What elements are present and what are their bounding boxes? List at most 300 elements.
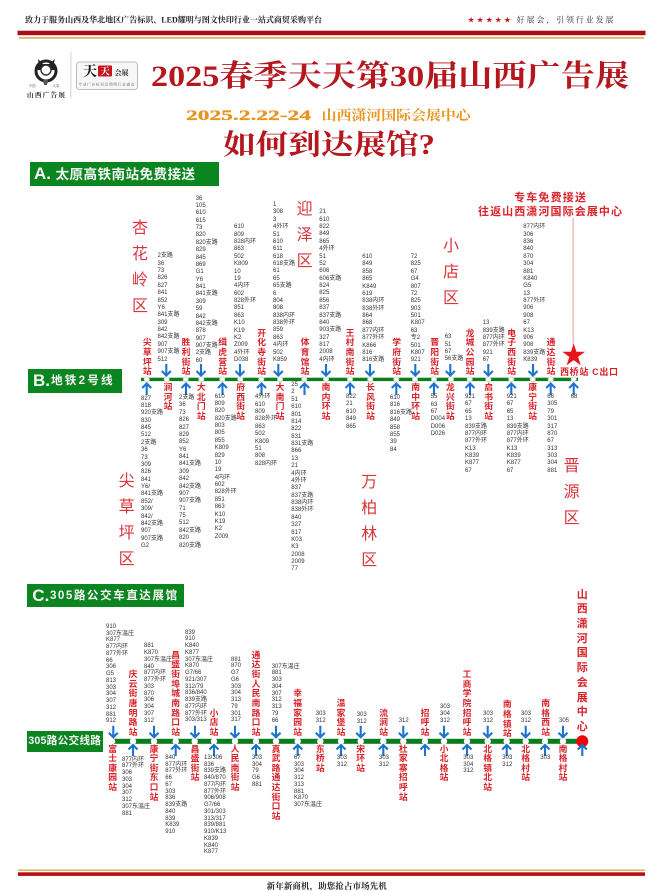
bus list: 大南门站: 6: [273, 290, 276, 296]
bus list: 长风街站: 877内环: [362, 328, 384, 334]
bus list: 大南门站: 863: [273, 335, 283, 341]
district: 迎泽区: 迎泽区: [297, 201, 313, 270]
bus list: 富士康园站: 303: [106, 685, 116, 691]
bus list: 缉虎营站: 828外环: [215, 489, 237, 495]
bus list: 康宁街站: 304: [523, 261, 533, 267]
bus list: 庆云街唐明路站: 306: [122, 770, 132, 776]
stop: 小店站: 小店站: [210, 708, 218, 737]
bus list: 学府街站: 84: [390, 447, 397, 453]
bus list: 大南门站: 859: [273, 327, 283, 333]
bus list: 康宁街站: K840: [523, 276, 537, 282]
bus list: 龙城公园站: 13: [465, 416, 472, 422]
bus list: 缉虎营站: 820: [215, 408, 225, 414]
bus list: 学府街站: 849: [390, 417, 400, 423]
bus list: 南内环站: 824: [319, 283, 329, 289]
bus list: 涧河站: 36: [158, 261, 164, 267]
bus list: 龙城公园站: K839: [465, 453, 479, 459]
stop: 通达街人民南路口站: 通达街人民南路口站: [252, 650, 260, 737]
bus list: 缉虎营站: 855: [215, 438, 225, 444]
bus list: 昌盛街埠城南路口站: 877外环: [165, 768, 187, 774]
bus list: 人民南街站: 303: [231, 684, 241, 690]
bus list: 府西街站: K19: [234, 328, 245, 334]
bus list: 开化寺街站: 809: [255, 409, 265, 415]
logo: emblem: 中国: [28, 83, 36, 88]
station: 开化寺街站: 开化寺街站: [257, 328, 266, 376]
bus list: 长风街站: 619: [362, 291, 372, 297]
bus list: 南中环站: [411, 254, 425, 363]
station: 王村南街站: 王村南街站: [346, 328, 354, 376]
bus list: 电子西街站: 67: [507, 401, 513, 407]
bus list: 北格镇北站: 312: [483, 718, 493, 724]
bus list: 小北格站: [440, 704, 450, 724]
bus list: 大南门站: 4外环: [273, 224, 288, 230]
bus list: 王村南街站: 865: [346, 424, 356, 430]
bus list: 昌盛街站: K877: [185, 650, 199, 656]
bus list: 昌盛街埠城南路口站: 303: [165, 789, 175, 795]
bus list: 小北格站: 312: [440, 718, 450, 724]
bus list: 幸福家园站: 303: [294, 762, 304, 768]
bus list: 府西街站: 610: [234, 224, 244, 230]
bus list: 缉虎营站: 851: [215, 497, 225, 503]
bus list: 电子西街站: 877外环: [507, 438, 529, 444]
metro line: [141, 378, 578, 381]
bus list: 大北门站: Y6: [196, 277, 203, 283]
bus list: 府西街站: 502: [234, 254, 244, 260]
bus list: 东桥站: 312: [316, 718, 326, 724]
bus list: 通达街站: [547, 394, 558, 474]
bus list: 长风街站: 838内环: [362, 298, 384, 304]
bus list: 大北门站: 2支路: [196, 350, 211, 356]
bus list: 真武路通达街口站: 881: [272, 670, 282, 676]
bus list: 涧河站: 842: [158, 327, 168, 333]
bus list: 庆云街唐明路站: 877外环: [122, 763, 144, 769]
bus list: 胜利街站: 820: [179, 535, 189, 541]
bus list: 尖草坪站: Y6/: [141, 484, 150, 490]
bus list: 开化寺街站: 808: [255, 453, 265, 459]
bus list: 小店站: 301/303: [204, 809, 226, 815]
bus list: 小店站: 313/317: [204, 816, 226, 822]
bus list: 缉虎营站: K2: [215, 526, 222, 532]
bus list: 南中环站: 903: [411, 306, 421, 312]
stop: 人民南街站: 人民南街站: [231, 744, 239, 792]
stop: 温家堡站: 温家堡站: [337, 698, 345, 737]
bus list: 温家堡站: 312: [337, 762, 347, 768]
bus list: 昌盛街埠城南路口站: 910: [165, 829, 175, 835]
top right slogan: ★★★★★ 好展会，引领行业发展: [468, 14, 614, 26]
bus list: 昌盛街埠城南路口站: 836: [165, 795, 175, 801]
bus list: 尖草坪站: 73: [141, 455, 148, 461]
red header bar: [18, 31, 646, 35]
footer gold bar: [18, 869, 645, 871]
bus list: 胜利街站: 309: [179, 469, 189, 475]
footer red bar: [18, 872, 645, 876]
bus list: 缉虎营站: K19: [215, 519, 225, 525]
bus list: 工商学院招呼站: 304: [463, 762, 473, 768]
bus list: 电子西街站: K13: [507, 446, 517, 452]
bus list: 工商学院招呼站: 312: [463, 768, 473, 774]
bus list: 长风街站: 816支路: [362, 357, 384, 363]
bus list: 康宁街东口站: 877外环: [144, 677, 166, 683]
bus list: 龙城公园站: [465, 394, 487, 474]
bus list: 昌盛街站: 910: [185, 636, 195, 642]
bus list: 涧河站: [158, 252, 180, 363]
footer slogan: 新年新商机，助您抢占市场先机: [267, 881, 387, 891]
bus list: 府西街站: K10: [234, 320, 245, 326]
bus list: 真武路通达街口站: 313: [272, 704, 282, 710]
bus list: 胜利街站: 73: [179, 410, 186, 416]
bus list: 南中环站: G4: [411, 276, 419, 282]
bus list: 康宁街站: 881: [523, 269, 533, 275]
bus list: 南中环站: 67: [411, 269, 417, 275]
bus list: 康宁街东口站: 307东温庄: [144, 657, 172, 663]
bus list: 龙城公园站: K13: [465, 446, 476, 452]
station: 府西街站: 府西街站: [236, 382, 245, 421]
bus list: 龙城公园站: 67: [465, 401, 472, 407]
stop: 昌盛街埠城南路口站: 昌盛街埠城南路口站: [171, 650, 180, 737]
bus list: 人民南街站: 304: [231, 690, 241, 696]
arrows pointing down to bus line: [109, 726, 568, 737]
bus list: 流涧站: 312: [379, 762, 389, 768]
section A heading: A.: [34, 164, 51, 183]
bus list: 富士康园站: 877外环: [106, 651, 128, 657]
terminal: 山西潇河国际会展中心: 山西潇河国际会展中心: [577, 589, 588, 733]
bus list: 尖草坪站: 826: [141, 469, 151, 475]
bus list: 体育馆站: 837: [291, 485, 301, 491]
bus list: 昌盛街站: K870: [185, 663, 199, 669]
section C heading: C.: [32, 586, 49, 605]
bus list: 开化寺街站: K809: [255, 439, 269, 445]
bus list: 南内环站: 21: [319, 209, 326, 215]
bus list: 通达街人民南路口站: 303: [252, 755, 262, 761]
subtitle question: 如何到达展馆?: [223, 129, 435, 161]
bus list: 尖草坪站: 36: [141, 447, 148, 453]
bus list: 流涧站: 303: [379, 755, 389, 761]
bus list: 大北门站: 820: [196, 232, 206, 238]
stop: 康宁街东口站: 康宁街东口站: [150, 744, 158, 802]
bus list: 胜利街站: 71: [179, 506, 186, 512]
bus list: 昌盛街埠城南路口站: 840: [165, 809, 175, 815]
bus list: 通达街站: 870: [547, 431, 557, 437]
bus list: 康宁街站: 306: [523, 232, 533, 238]
bus list: 南内环站: 865: [319, 239, 329, 245]
bus list: 通达街站: 301: [547, 416, 557, 422]
bus list: 电子西街站: [507, 394, 529, 474]
bus list: 启书街站: 877内环: [483, 335, 505, 341]
bus list: 大南门站: 618: [273, 254, 283, 260]
bus list: 通达街站: 304: [547, 460, 557, 466]
bus list: 体育馆站: 838内环: [291, 500, 313, 506]
bus list: 尖草坪站: 841支路: [141, 491, 163, 497]
bus list: 南内环站: 4内环: [319, 357, 335, 363]
bus list: 胜利街站: 2支路: [179, 395, 194, 401]
bus list: 晋阳街站: 55: [431, 394, 437, 400]
bus list: 昌盛街埠城南路口站: 840: [165, 755, 175, 761]
section C heading: [27, 584, 184, 607]
bus list: 长风街站: [362, 254, 384, 363]
bus list: 真武路通达街口站: 303: [272, 677, 282, 683]
bus list: 通达街站: 313: [547, 446, 557, 452]
bus list: 通达街站: 881: [547, 468, 557, 474]
bus list: 龙城公园站: 839支路: [465, 424, 487, 430]
bus list: 大北门站: 820支路: [196, 240, 218, 246]
bus list: 大北门站: 36: [196, 196, 202, 202]
bus list: 胜利街站: 36: [179, 402, 186, 408]
bus list: 康宁街站: 13: [523, 291, 530, 297]
bus list: 西桥站: 68: [571, 394, 577, 400]
bus list: 龙城公园站: 65: [465, 409, 472, 415]
bus list: 开化寺街站: [255, 392, 277, 467]
bus list: 体育馆站: 814: [291, 419, 301, 425]
bus list: 南内环站: 51: [319, 254, 326, 260]
bus list: 尖草坪站: 845: [141, 425, 151, 431]
bus list: 尖草坪站: 309: [141, 462, 151, 468]
logo: tiantian exhibition badge: 天: [100, 66, 110, 78]
bus list: 大南门站: 838内环: [273, 313, 295, 319]
bus list: 南格镇站: 303: [502, 755, 512, 761]
bus list: 开化寺街站: 863: [255, 424, 265, 430]
bus list: 启书街站: [483, 320, 505, 363]
bus list: 大北门站: 309: [196, 299, 206, 305]
bus list: 缉虎营站: 602: [215, 482, 225, 488]
district: 万柏林区: 万柏林区: [361, 474, 377, 569]
bus list: 龙兴街站: 63: [445, 334, 451, 340]
bus list: 幸福家园站: K870: [294, 795, 308, 801]
bus list: 富士康园站: K877: [106, 637, 120, 643]
bus list: 通达街站: 317: [547, 424, 557, 430]
bus list: 体育馆站: 51: [291, 397, 298, 403]
bus list: 南格西站: 303: [540, 755, 550, 761]
bus list: 真武路通达街口站: 79: [272, 711, 278, 717]
bus list: 晋阳街站: 67: [431, 409, 437, 415]
bus list: 东桥站: [316, 710, 326, 724]
bus list: 学府街站: 816支路: [390, 410, 412, 416]
bus list: 涧河站: 842支路: [158, 334, 180, 340]
bus list: 昌盛街站: 836/840: [185, 690, 207, 696]
station: 长风街站: 长风街站: [366, 382, 375, 421]
bus list: 胜利街站: 827: [179, 424, 189, 430]
stop: 南格镇站: 南格镇站: [503, 699, 512, 738]
logo: emblem: 太原: [52, 83, 60, 88]
bus list: 学府街站: 610: [390, 395, 400, 401]
bus list: 长风街站: 877外环: [362, 335, 384, 341]
bus list: 小店站: 839支路: [204, 768, 226, 774]
bus list: 体育馆站: 4内环: [291, 470, 307, 476]
bus list: 尖草坪站: 309/: [141, 506, 153, 512]
bus list: 昌盛街站: 839支路: [185, 697, 207, 703]
bus list: 富士康园站: 912: [106, 718, 116, 724]
bus list: 大南门站: [273, 202, 295, 363]
bus list: 流涧站: [379, 755, 389, 768]
bus list: 启书街站: 67: [483, 357, 489, 363]
bus list: 温家堡站: 303: [337, 755, 347, 761]
bus list: 胜利街站: 75: [179, 513, 186, 519]
route label: 305路公交线路: [28, 735, 101, 747]
bus list: 尖草坪站: 907支路: [141, 536, 163, 542]
section B heading: B.: [33, 371, 50, 390]
bus list: 康宁街站: G5: [523, 283, 531, 289]
bus list: 南中环站: 501: [411, 313, 421, 319]
section B heading: 地铁2号线: [51, 374, 115, 387]
bus list: 北格镇北站: 303: [483, 711, 493, 717]
bus list: 南中环站: 501: [411, 342, 421, 348]
bus list: 涧河站: 826: [158, 275, 168, 281]
stop: 北格镇北站: 北格镇北站: [483, 744, 492, 792]
bus list: 小店站: 839/881: [204, 822, 226, 828]
bus list: 尖草坪站: [141, 396, 163, 549]
bus list: 通达街人民南路口站: 79: [252, 768, 259, 774]
bus list: 王村南街站: 822: [346, 394, 356, 400]
bus list: 府西街站: 19: [234, 276, 241, 282]
bus list: 缉虎营站: 610: [215, 394, 225, 400]
bus list: 尖草坪站: 907: [141, 528, 151, 534]
bus list: 南中环站: 825: [411, 261, 421, 267]
bus list: 缉虎营站: 805: [215, 430, 225, 436]
bus list: 府西街站: 10: [234, 269, 241, 275]
bus list: 长风街站: 858: [362, 269, 372, 275]
bus list: 通达街站: 79: [547, 409, 554, 415]
bus list: 小店站: 840/870: [204, 775, 226, 781]
bus list: 开化寺街站: 502: [255, 431, 265, 437]
bus list: 学府街站: 858: [390, 424, 400, 430]
bus list: 大南门站: 838外环: [273, 320, 295, 326]
callout: free shuttle: 专车免费接送: [514, 190, 586, 204]
bus list: 开化寺街站: 51: [255, 446, 262, 452]
stop: 北格村站: 北格村站: [521, 744, 530, 782]
bus list: 尖草坪站: 512: [141, 432, 151, 438]
bus list: 大南门站: 61: [273, 268, 280, 274]
bus list: 体育馆站: 21: [291, 463, 298, 469]
bus list: 康宁街东口站: 877内环: [144, 670, 166, 676]
bus list: 体育馆站: 2009: [291, 559, 305, 565]
bus list: 真武路通达街口站: 307东温庄: [272, 664, 300, 670]
logo: tiantian exhibition badge: 专业广告标识及照明行业盛会: [78, 82, 135, 86]
bus list: 昌盛街埠城南路口站: 839支路: [165, 802, 187, 808]
bus list: 学府街站: 855: [390, 432, 400, 438]
bus list: 开化寺街站: 828外环: [255, 416, 277, 422]
bus list: 小店站: K877: [204, 849, 218, 855]
bus list: 庆云街唐明路站: 312: [122, 797, 132, 803]
bus list: 启书街站: 877外环: [483, 342, 505, 348]
bus list: 富士康园站: 304: [106, 691, 116, 697]
stop: 流涧站: 流涧站: [379, 708, 388, 737]
station: 学府街站: 学府街站: [392, 337, 401, 376]
bus list: 人民南街站: 79: [231, 704, 238, 710]
bus list: 大北门站: 842支路: [196, 321, 218, 327]
bus list: 大南门站: 308: [273, 209, 283, 215]
station: 大南门站: 大南门站: [276, 382, 284, 421]
bus list: 富士康园站: [106, 624, 134, 724]
bus list: 庆云街唐明路站: 304: [122, 784, 132, 790]
bus list: 涧河站: 512: [158, 357, 168, 363]
bus list: 涧河站: 852: [158, 298, 168, 304]
bus list: 胜利街站: 820支路: [179, 542, 201, 548]
bus list: 体育馆站: 25: [291, 382, 298, 388]
station: 通达街站: 通达街站: [547, 337, 555, 376]
bus list: 康宁街东口站: 840: [144, 664, 154, 670]
bus list: 府西街站: 863: [234, 246, 244, 252]
bus list: 长风街站: K849: [362, 284, 376, 290]
bus list: 晋阳街站: D026: [431, 431, 445, 437]
bus list: 人民南街站: G7: [231, 670, 239, 676]
bus list: 杜家寨招呼站: 312: [399, 718, 409, 724]
bus list: 庆云街唐明路站: 881: [122, 811, 132, 817]
stop: 工商学院招呼站: 工商学院招呼站: [463, 669, 471, 737]
logo: emblem: 山西广告展: [27, 90, 66, 99]
bus list: 长风街站: 838外环: [362, 306, 384, 312]
bus list: 大南门站: 611: [273, 246, 283, 252]
bus list: 胜利街站: [179, 394, 201, 548]
stop: 南格西站: 南格西站: [541, 698, 550, 737]
bus list: 大北门站: 73: [196, 225, 202, 231]
header: tagline bars, logos, titles: [18, 14, 646, 161]
bus list: 大南门站: 610: [273, 239, 283, 245]
bus list: 电子西街站: 921: [507, 394, 517, 400]
bus list: 南内环站: 606: [319, 268, 329, 274]
bus list: 富士康园站: 306: [106, 664, 116, 670]
bus list: 昌盛街埠城南路口站: 67: [165, 782, 172, 788]
bus list: 涧河站: 309: [158, 320, 168, 326]
bus list: 南中环站: 72: [411, 291, 417, 297]
bus list: 昌盛街埠城南路口站: 877内环: [165, 762, 187, 768]
bus list: 大南门站: 804: [273, 298, 283, 304]
bus list: 北格村站: 312: [521, 718, 531, 724]
bus list: 康宁街东口站: 306: [144, 697, 154, 703]
bus list: 康宁街站: 840: [523, 246, 533, 252]
bus list: 通达街人民南路口站: 304: [252, 762, 262, 768]
bus list: 涧河站: 2支路: [158, 253, 173, 259]
bus list: 南内环站: 327: [319, 335, 329, 341]
bus list: 涧河站: Y6: [158, 305, 165, 311]
bus list: 启书街站: 13: [483, 320, 489, 326]
bus list: 人民南街站: 313: [231, 697, 241, 703]
bus list: 康宁街东口站: [144, 642, 172, 724]
bus list: 宋环站: [357, 712, 367, 725]
bus list: 体育馆站: 327: [291, 522, 301, 528]
bus list: 南内环站: 610: [319, 217, 329, 223]
district: 杏花岭区: 杏花岭区: [132, 220, 148, 315]
station: 南中环站: 南中环站: [411, 382, 420, 421]
bus list: 康宁街站: K13: [523, 328, 534, 334]
bus list: 康宁街站: 836: [523, 239, 533, 245]
callout: free shuttle: 往返山西潇河国际会展中心: [478, 204, 622, 218]
bus list: 庆云街唐明路站: 303: [122, 777, 132, 783]
station: 大北门站: 大北门站: [197, 382, 206, 421]
bus list: 康宁街站: [523, 222, 545, 363]
date and venue: [186, 107, 473, 124]
bus list: 胜利街站: 512: [179, 520, 189, 526]
bus list: 涧河站: 907: [158, 342, 168, 348]
bus list: 大北门站: 842: [196, 314, 206, 320]
stop: 招呼站: 招呼站: [421, 708, 429, 737]
bus list: 小店站: 877内环: [204, 782, 226, 788]
bus list: 富士康园站: 877内环: [106, 644, 128, 650]
bus list: 龙兴街站: 67: [445, 349, 451, 355]
bus list: 大北门站: 841支路: [196, 291, 218, 297]
bus list: 龙兴街站: 51: [445, 342, 451, 348]
gold header bar: [19, 37, 644, 39]
station: 龙兴街站: 龙兴街站: [446, 382, 455, 421]
bus list: 南内环站: 817: [319, 342, 329, 348]
bus list: 长风街站: 816: [362, 350, 372, 356]
bus list: 尖草坪站: 842支路: [141, 521, 163, 527]
bus list: 幸福家园站: 304: [294, 768, 304, 774]
bus list: 胜利街站: 842: [179, 476, 189, 482]
bus list: 康宁街东口站: 870: [144, 691, 154, 697]
bus list: 通达街人民南路口站: [252, 754, 262, 788]
bus list: 富士康园站: 66: [106, 658, 113, 664]
bus list: 昌盛街埠城南路口站: 66: [165, 775, 172, 781]
bus list: 南中环站: K807: [411, 320, 425, 326]
